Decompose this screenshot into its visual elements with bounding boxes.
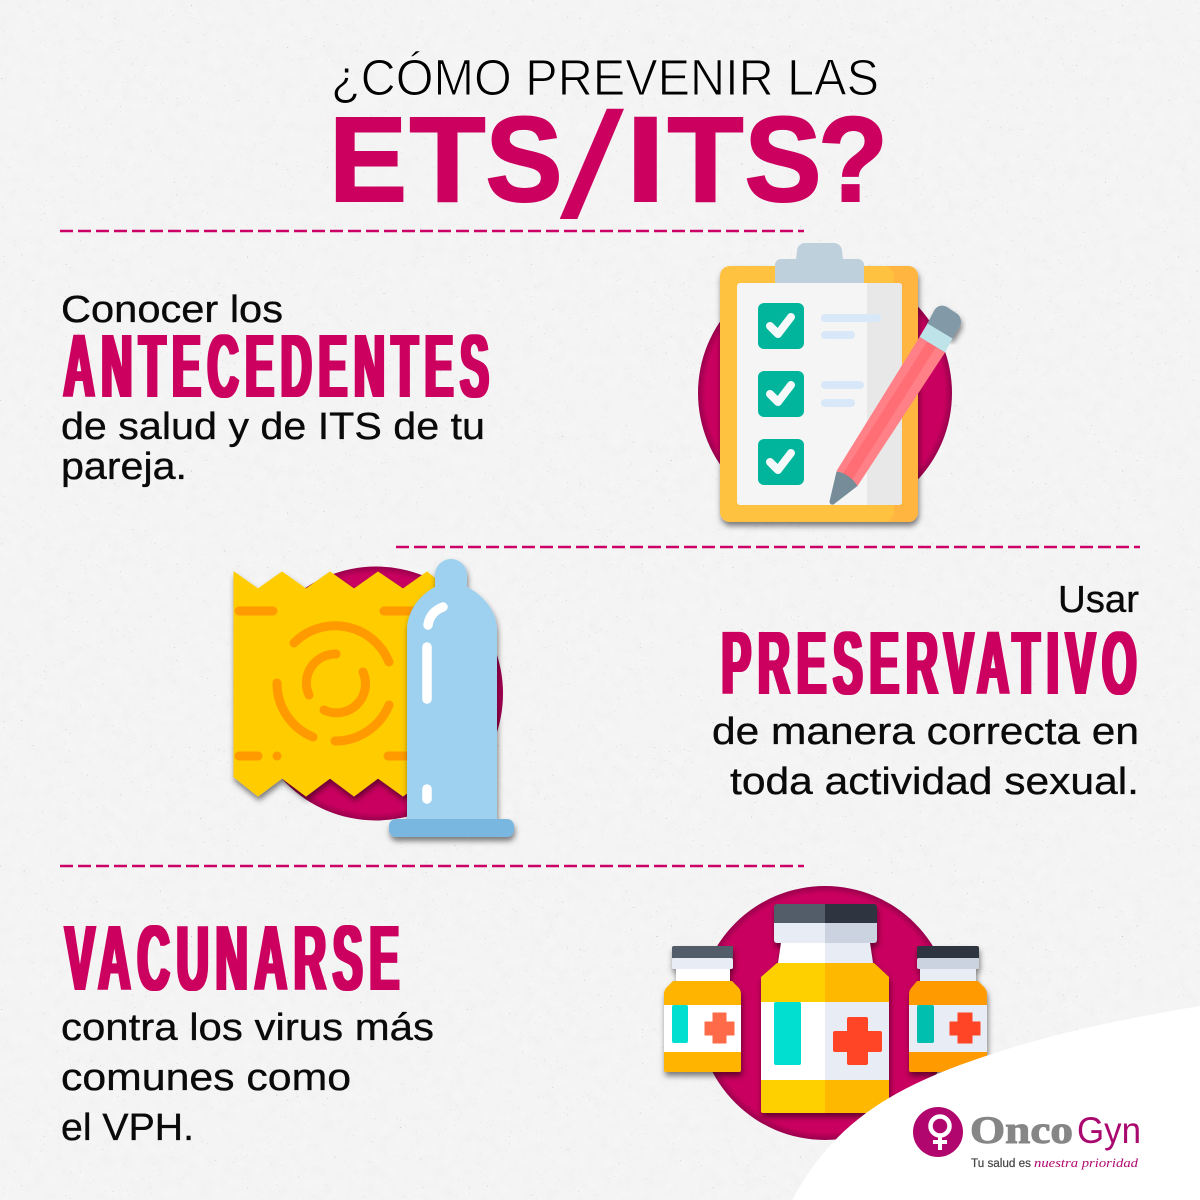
white corner panel: [792, 1006, 1200, 1200]
title line two: E: [329, 91, 407, 227]
title line two: ?: [818, 91, 888, 227]
text block: vacunarse: VACUNARSE: [65, 906, 406, 1010]
text block: preservativo: Usar: [1058, 579, 1139, 621]
text block: preservativo: de manera correcta en: [712, 711, 1139, 753]
text block: vacunarse: [61, 906, 434, 1149]
text block: vacunarse: comunes como: [61, 1057, 351, 1099]
title line two: I: [626, 91, 665, 227]
logo emblem: [913, 1107, 963, 1157]
logo wordmark Onco: Onco: [970, 1109, 1073, 1152]
title: [329, 49, 888, 248]
title line two: S: [486, 91, 562, 227]
text block: vacunarse: el VPH.: [61, 1107, 194, 1149]
magenta disc: [249, 566, 503, 820]
right bottle: [909, 946, 987, 1072]
text block: antecedentes: de salud y de ITS de tu: [61, 406, 485, 448]
wrapper markings: [239, 611, 420, 756]
title line two: /: [552, 82, 632, 248]
title line two: [329, 82, 888, 248]
clip: [775, 243, 864, 283]
paper sheet: [737, 283, 902, 505]
icon: condom and wrapper: [234, 559, 514, 837]
icon: clipboard with pencil: [698, 243, 961, 522]
checkbox three: [758, 439, 804, 485]
logo tagline accent: nuestra prioridad: [1034, 1155, 1139, 1170]
checkbox one: [758, 303, 804, 349]
list lines: [821, 314, 881, 407]
pencil: [829, 306, 961, 505]
centre bottle: [761, 904, 889, 1113]
logo wordmark Gyn: Gyn: [1077, 1110, 1141, 1151]
logo tagline: Tu salud es: [971, 1158, 1031, 1170]
text: ANTECEDENTES: [64, 317, 496, 417]
left bottle: [664, 946, 741, 1072]
title line two: S: [744, 91, 822, 227]
wrapper packet: [234, 572, 440, 796]
clipboard board: [720, 266, 918, 522]
magenta disc: [698, 886, 952, 1140]
title line two: T: [668, 91, 744, 227]
text block: antecedentes: [61, 289, 496, 488]
text block: preservativo: [712, 579, 1144, 803]
text block: vacunarse: contra los virus más: [61, 1007, 434, 1049]
title line two: T: [410, 91, 486, 227]
logo: OncoGyn: [913, 1107, 1141, 1170]
icon: vaccine bottles: [664, 886, 987, 1140]
text block: antecedentes: Conocer los: [61, 289, 283, 331]
magenta disc: [698, 266, 952, 520]
text block: antecedentes: pareja.: [61, 446, 187, 488]
checkbox two: [758, 371, 804, 417]
title line one: ¿CÓMO PREVENIR LAS: [331, 49, 879, 106]
condom: [389, 559, 514, 837]
condom highlights: [427, 607, 443, 799]
text block: preservativo: toda actividad sexual.: [730, 761, 1139, 803]
